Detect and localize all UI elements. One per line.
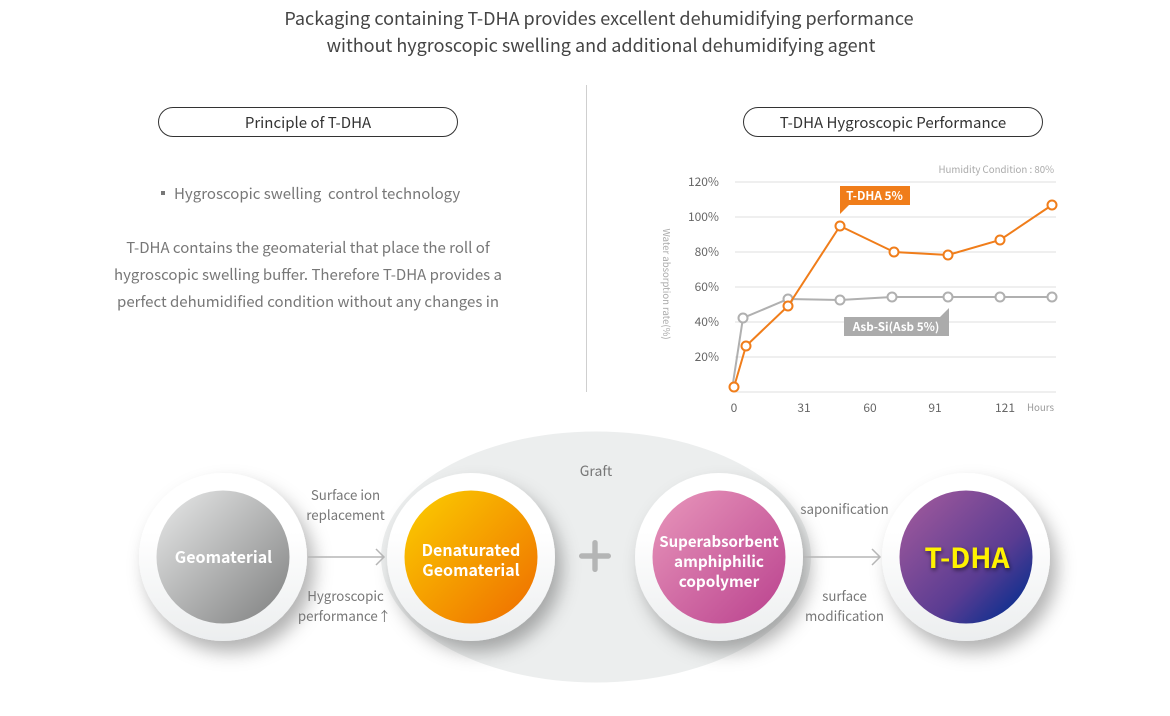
heading: hygroscopic performance <box>744 108 1042 136</box>
circle: denaturated geomaterial <box>387 473 555 641</box>
callout: Asb-Si: Asb-Si(Asb 5%) <box>852 318 939 335</box>
label: surface ion replacement: Surface ion <box>311 485 380 504</box>
description text: T-DHA contains the geomaterial that place the roll of <box>126 237 491 258</box>
circle: denaturated geomaterial: Geomaterial <box>422 557 520 581</box>
y axis labels: 20% <box>695 348 719 365</box>
panel: hygroscopic performance <box>660 108 1056 416</box>
y axis labels: 40% <box>695 313 719 330</box>
bullet heading: Hygroscopic swelling control technology <box>174 183 460 204</box>
label: surface modification: surface <box>822 586 867 605</box>
heading: principle of T-DHA: Principle of T-DHA <box>245 112 372 133</box>
series: T-DHA <box>730 200 1056 392</box>
circle: T-DHA: T-DHA <box>925 537 1010 577</box>
x axis labels: 0 <box>731 399 738 416</box>
circle: geomaterial <box>139 473 307 641</box>
heading: hygroscopic performance: T-DHA Hygroscopic Performance <box>780 112 1006 133</box>
circle: superabsorbent amphiphilic copolymer: amphiphilic <box>674 550 764 572</box>
circle: T-DHA <box>882 473 1050 641</box>
y axis labels: 80% <box>695 243 719 260</box>
callout: T-DHA 5%: T-DHA 5% <box>846 187 903 204</box>
circle: superabsorbent amphiphilic copolymer <box>635 473 803 641</box>
x axis labels: 121 <box>995 399 1015 416</box>
humidity condition note: Humidity Condition : 80% <box>938 162 1054 176</box>
y axis labels: 100% <box>688 208 719 225</box>
arrow: geomaterial to denaturated <box>308 549 384 565</box>
graft background ellipse <box>381 432 811 682</box>
process diagram <box>139 432 1050 682</box>
label: surface modification: modification <box>805 606 884 625</box>
panel: principle of T-DHA <box>114 108 502 312</box>
label: surface ion replacement: replacement <box>306 505 385 524</box>
label: hygroscopic performance: Hygroscopic <box>307 586 384 605</box>
arrow: copolymer to T-DHA <box>803 549 880 565</box>
label: surface modification <box>805 586 884 625</box>
x axis labels: 31 <box>797 399 811 416</box>
x axis labels <box>731 399 1015 416</box>
plus sign <box>579 540 611 572</box>
title: Packaging containing T-DHA provides excellent dehumidifying performance <box>284 5 914 31</box>
y axis labels <box>688 173 719 365</box>
title <box>284 5 914 58</box>
callout: T-DHA 5% <box>840 186 910 214</box>
circle: geomaterial: Geomaterial <box>175 544 272 568</box>
label: surface ion replacement <box>306 485 385 524</box>
y axis title: Water absorption rate(%) <box>660 228 674 340</box>
label: hygroscopic performance: performance↑ <box>298 606 391 625</box>
circle: superabsorbent amphiphilic copolymer: Superabsorbent <box>659 531 779 552</box>
label: hygroscopic performance <box>298 586 391 625</box>
label: saponification: saponification <box>800 499 889 518</box>
circle: superabsorbent amphiphilic copolymer: copolymer <box>679 570 760 592</box>
description text: perfect dehumidified condition without any changes in <box>117 291 499 312</box>
circle: denaturated geomaterial: Denaturated <box>422 537 520 561</box>
description text <box>114 237 502 312</box>
line chart <box>660 173 1056 416</box>
y axis labels: 120% <box>688 173 719 190</box>
y axis labels: 60% <box>695 278 719 295</box>
series: Asb-Si <box>733 292 1056 383</box>
callout: Asb-Si <box>844 308 949 336</box>
title: without hygroscopic swelling and additional dehumidifying agent <box>327 32 876 58</box>
x axis labels: 91 <box>928 399 942 416</box>
label: graft: Graft <box>580 461 613 481</box>
x axis labels: 60 <box>863 399 877 416</box>
x axis unit: Hours <box>1027 400 1054 414</box>
description text: hygroscopic swelling buffer. Therefore T-DHA provides a <box>114 264 502 285</box>
heading: principle of T-DHA <box>158 108 458 136</box>
